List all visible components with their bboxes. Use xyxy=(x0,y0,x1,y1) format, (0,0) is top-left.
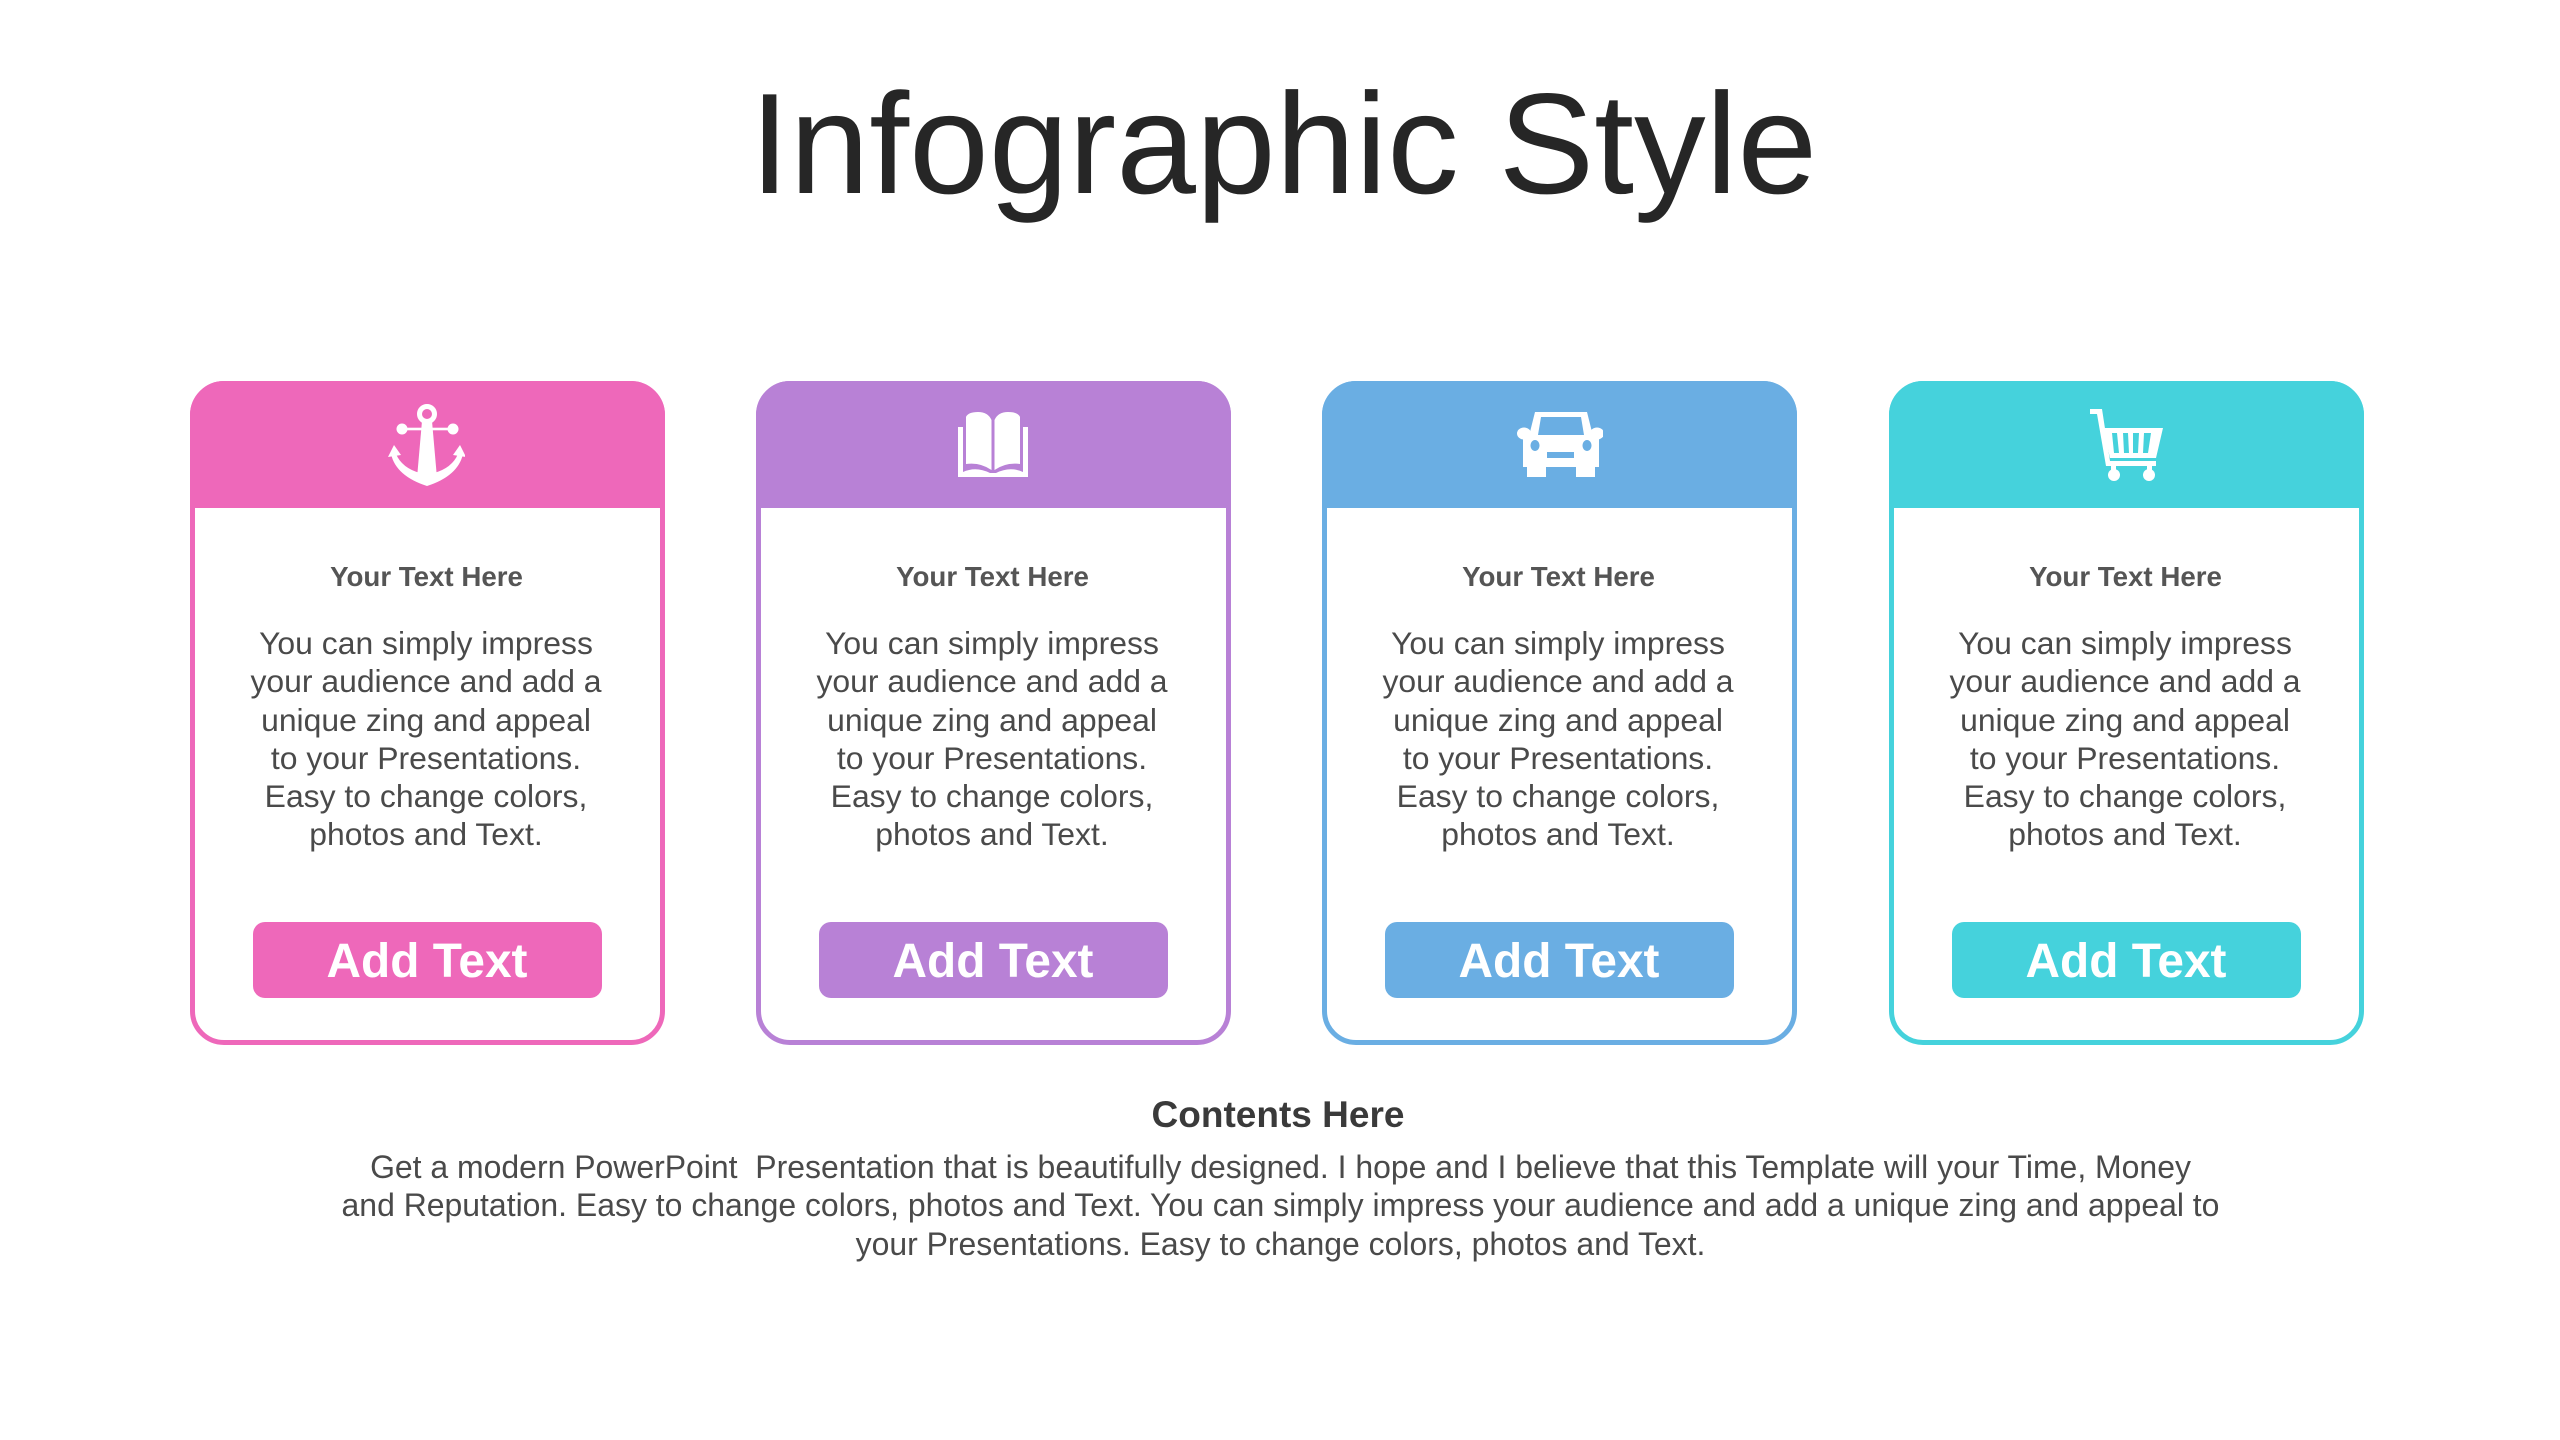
card 2 body text: photos and Text. xyxy=(875,816,1109,852)
contents paragraph: and Reputation. Easy to change colors, photos and Text. You can simply impress your audience and add a unique zing and appeal to xyxy=(342,1187,2219,1223)
card 2 body text: You can simply impress xyxy=(825,625,1159,661)
card 3 body text: unique zing and appeal xyxy=(1393,702,1723,738)
panel: card 1 pink xyxy=(190,381,665,1045)
card 4 body text: You can simply impress xyxy=(1958,625,2292,661)
card 2 subheading: Your Text Here xyxy=(896,561,1089,592)
card 3 button: Add Text xyxy=(1459,935,1659,988)
card 3 header with car icon xyxy=(1322,381,1797,508)
card 2 body text: to your Presentations. xyxy=(837,740,1147,776)
card 3 body text: photos and Text. xyxy=(1441,816,1675,852)
contents heading: Contents Here xyxy=(1152,1094,1404,1135)
card 1 body text: unique zing and appeal xyxy=(261,702,591,738)
card 4 button: Add Text xyxy=(2026,935,2226,988)
card 2 body text: your audience and add a xyxy=(816,663,1168,699)
card 2 button: Add Text xyxy=(893,935,1093,988)
panel: card 4 teal xyxy=(1889,381,2364,1045)
card 4 body text: photos and Text. xyxy=(2008,816,2242,852)
card 2 body text: Easy to change colors, xyxy=(831,778,1153,814)
card 1 button xyxy=(252,922,602,998)
card 1 body text: your audience and add a xyxy=(250,663,602,699)
card 2 button xyxy=(818,922,1168,998)
card 3 body text: Easy to change colors, xyxy=(1397,778,1719,814)
card 4 body text: your audience and add a xyxy=(1949,663,2301,699)
card 1 body text: You can simply impress xyxy=(259,625,593,661)
card 1 body text: Easy to change colors, xyxy=(265,778,587,814)
contents paragraph: Get a modern PowerPoint Presentation that is beautifully designed. I hope and I believe that this Template will your Time, Money xyxy=(370,1149,2191,1185)
card 4 body text: Easy to change colors, xyxy=(1964,778,2286,814)
title: Infographic Style xyxy=(750,64,1817,224)
card 4 subheading: Your Text Here xyxy=(2029,561,2222,592)
card 3 button xyxy=(1384,922,1734,998)
card 1 subheading: Your Text Here xyxy=(330,561,523,592)
card 3 body text: You can simply impress xyxy=(1391,625,1725,661)
card 4 body text: to your Presentations. xyxy=(1970,740,2280,776)
card 4 header with cart icon xyxy=(1889,381,2364,508)
card 4 button xyxy=(1952,922,2300,998)
card 4 body text: unique zing and appeal xyxy=(1960,702,2290,738)
icon: car xyxy=(1517,412,1603,477)
panel: card 3 blue xyxy=(1322,381,1797,1045)
icon: open book xyxy=(958,412,1028,477)
contents paragraph xyxy=(342,1149,2219,1262)
card 1 body text xyxy=(250,625,602,852)
contents paragraph: your Presentations. Easy to change colors, photos and Text. xyxy=(856,1226,1705,1262)
card 2 body text xyxy=(816,625,1168,852)
card 1 body text: photos and Text. xyxy=(309,816,543,852)
card 2 body text: unique zing and appeal xyxy=(827,702,1157,738)
panel: card 2 purple xyxy=(756,381,1231,1045)
card 3 subheading: Your Text Here xyxy=(1462,561,1655,592)
card 1 body text: to your Presentations. xyxy=(271,740,581,776)
card 2 header with book icon xyxy=(756,381,1231,508)
card 1 header with anchor icon xyxy=(190,381,665,508)
card 3 body text xyxy=(1382,625,1734,852)
card 1 button: Add Text xyxy=(327,935,527,988)
icon: shopping cart xyxy=(2090,409,2163,481)
icon: anchor xyxy=(388,404,465,486)
card 3 body text: your audience and add a xyxy=(1382,663,1734,699)
card 3 body text: to your Presentations. xyxy=(1403,740,1713,776)
card 4 body text xyxy=(1949,625,2301,852)
